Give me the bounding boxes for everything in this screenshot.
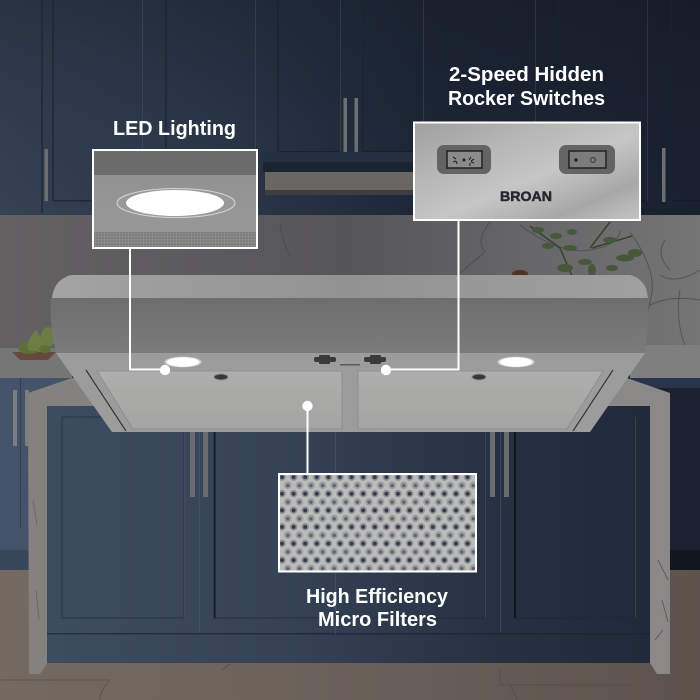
connector: LED lighting bbox=[130, 248, 170, 375]
LED lamp bbox=[126, 190, 224, 216]
brand logo: BROAN bbox=[500, 188, 552, 204]
hood LED right bbox=[497, 356, 535, 368]
cabinet handles: upper bbox=[44, 98, 666, 202]
background: lower right cabinet bbox=[625, 378, 700, 570]
background: lower left cabinet bbox=[0, 378, 74, 570]
filter panel right bbox=[358, 371, 603, 429]
heading: LED Lighting: LED Lighting bbox=[113, 117, 236, 140]
island handles bbox=[190, 432, 509, 497]
connector: rocker switches bbox=[381, 220, 458, 375]
LED lamp rim bbox=[117, 188, 235, 218]
heading: rocker switches bbox=[448, 63, 605, 110]
island waterfall counter bbox=[28, 378, 670, 674]
countertop: back left and right bbox=[0, 345, 700, 378]
hood switches bbox=[314, 355, 386, 366]
heading: micro filters: Micro Filters bbox=[318, 608, 437, 631]
filter panel left bbox=[97, 371, 342, 429]
light switch bbox=[559, 145, 615, 174]
fruit bowl bbox=[12, 327, 56, 360]
heading: rocker switches: Rocker Switches bbox=[448, 87, 605, 110]
connector: micro filters bbox=[302, 401, 313, 473]
hood top band bbox=[52, 275, 648, 298]
range hood bbox=[51, 275, 649, 432]
vent slits bbox=[86, 370, 613, 431]
heading: rocker switches: 2-Speed Hidden bbox=[449, 63, 604, 86]
hood LED left bbox=[164, 356, 202, 368]
panel: micro filter close-up bbox=[279, 474, 476, 572]
background: marble backsplash bbox=[0, 215, 700, 350]
range stub under wall cabinet bbox=[263, 152, 415, 195]
panel: rocker switches close-up bbox=[414, 122, 640, 220]
kitchen island bbox=[47, 400, 650, 663]
heading: micro filters: High Efficiency bbox=[306, 585, 449, 608]
hood front face bbox=[51, 298, 649, 353]
floor bbox=[0, 570, 700, 700]
background: upper cabinets bbox=[0, 0, 700, 216]
fan speed switch bbox=[437, 145, 491, 174]
heading: micro filters bbox=[306, 585, 449, 631]
panel: LED lighting close-up bbox=[93, 150, 257, 248]
hood underside bbox=[56, 353, 645, 432]
plant bbox=[512, 222, 642, 278]
sensors bbox=[214, 374, 486, 380]
